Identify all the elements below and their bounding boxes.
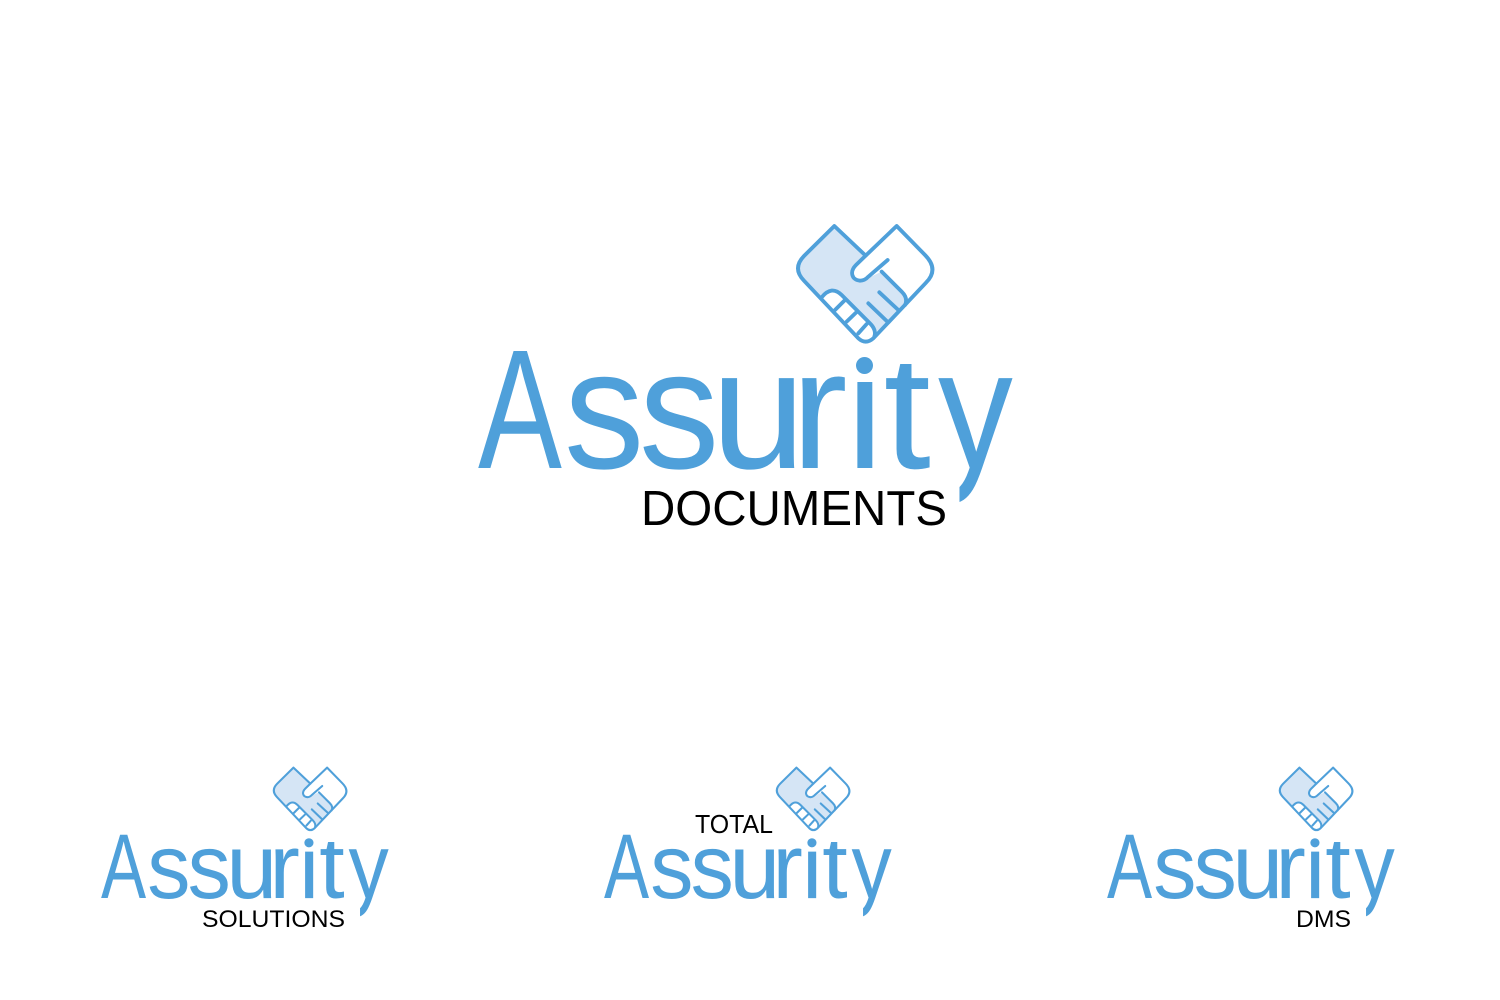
- wordmark: Assurity: [1107, 815, 1395, 917]
- wordmark: Assurity: i: [846, 315, 884, 505]
- wordmark: Assurity: t: [822, 815, 848, 917]
- wordmark: Assurity: r: [772, 815, 803, 917]
- wordmark: Assurity: A: [478, 315, 562, 505]
- wordmark: Assurity: y: [852, 815, 892, 917]
- wordmark: Assurity: A: [604, 815, 649, 917]
- icon: handshake heart: [272, 766, 348, 832]
- wordmark: Assurity: u: [729, 815, 780, 917]
- logo: Assurity DMS: [1107, 766, 1395, 933]
- label: SOLUTIONS: SOLUTIONS: [202, 906, 345, 933]
- wordmark: Assurity: s: [1153, 815, 1196, 917]
- wordmark: Assurity: [604, 815, 892, 917]
- wordmark: Assurity: A: [101, 815, 146, 917]
- label: DOCUMENTS: DOCUMENTS: [641, 482, 947, 536]
- wordmark: Assurity: u: [226, 815, 277, 917]
- icon: handshake heart: [796, 224, 934, 344]
- label: DMS: DMS: [1296, 906, 1351, 933]
- wordmark: Assurity: s: [691, 815, 734, 917]
- logo: Total Assurity: [604, 766, 892, 917]
- icon: handshake heart: [1278, 766, 1354, 832]
- wordmark: Assurity: t: [884, 315, 931, 505]
- wordmark: Assurity: r: [791, 315, 848, 505]
- wordmark: Assurity: u: [1232, 815, 1283, 917]
- wordmark: Assurity: t: [319, 815, 345, 917]
- label: TOTAL: TOTAL: [695, 809, 773, 839]
- wordmark: Assurity: [478, 315, 1012, 505]
- wordmark: Assurity: [101, 815, 389, 917]
- wordmark: Assurity: u: [711, 315, 806, 505]
- wordmark: Assurity: i: [299, 815, 319, 917]
- wordmark: Assurity: r: [269, 815, 300, 917]
- wordmark: Assurity: s: [147, 815, 190, 917]
- wordmark: Assurity: y: [938, 315, 1013, 505]
- wordmark: Assurity: s: [650, 815, 693, 917]
- logo: Assurity Documents: [478, 224, 1012, 536]
- wordmark: Assurity: A: [1107, 815, 1152, 917]
- wordmark: Assurity: s: [1194, 815, 1237, 917]
- wordmark: Assurity: y: [349, 815, 389, 917]
- icon: handshake heart: [776, 766, 850, 832]
- wordmark: Assurity: i: [802, 815, 822, 917]
- logo: Assurity Solutions: [101, 766, 389, 933]
- wordmark: Assurity: r: [1275, 815, 1306, 917]
- wordmark: Assurity: s: [564, 315, 644, 505]
- wordmark: Assurity: s: [639, 315, 719, 505]
- wordmark: Assurity: i: [1305, 815, 1325, 917]
- wordmark: Assurity: s: [188, 815, 231, 917]
- wordmark: Assurity: y: [1355, 815, 1395, 917]
- wordmark: Assurity: t: [1325, 815, 1351, 917]
